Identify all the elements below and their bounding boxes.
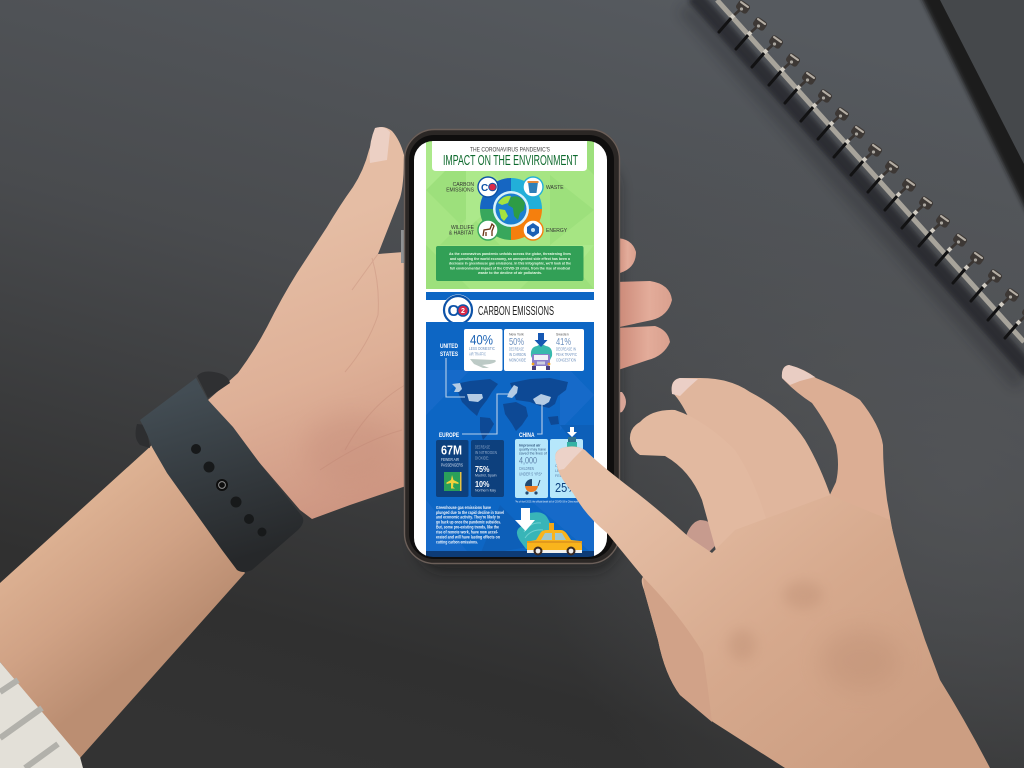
label: China: CHINA (519, 432, 535, 439)
wheel labels: ENERGY (546, 228, 568, 234)
card: China second stat: CARBON (555, 464, 571, 468)
card: air quality in China: saved the lives of (519, 452, 547, 456)
card: traffic cities: PEAK TRAFFIC (556, 352, 577, 357)
card: air quality in China: UNDER 5 YRS* (519, 472, 542, 476)
wheel labels: & HABITAT (449, 230, 474, 236)
icon: emissions stack (567, 427, 577, 447)
icon: CO2 badge: 2 (461, 308, 465, 315)
left forearm (0, 445, 245, 758)
card: air traffic: AIR TRAFFIC (469, 352, 486, 356)
ring finger (672, 378, 855, 570)
section heading (442, 294, 554, 322)
label: United States (440, 344, 458, 356)
intro text box: full environmental impact of the COVID-19 crisis, from the rise of medical (450, 266, 570, 270)
icon: deer (478, 220, 498, 240)
down arrow (515, 508, 535, 531)
card: nitrogen dioxide (471, 440, 504, 497)
card: nitrogen dioxide: DECREASE (475, 444, 490, 450)
icon: CO2 badge (442, 294, 474, 322)
icon: CO2 badge: C (448, 303, 460, 320)
far fingernail (782, 365, 815, 385)
emissions cloud (517, 512, 551, 549)
card: traffic cities: IN CARBON (509, 352, 526, 357)
intro text box: As the coronavirus pandemic unfolds across the globe, threatening lives (449, 252, 571, 256)
title card (432, 141, 587, 171)
taxi (527, 523, 582, 556)
closing paragraph: cutting carbon emissions. (436, 539, 478, 544)
card: nitrogen dioxide: IN NITROGEN (475, 450, 497, 455)
little finger tip (686, 520, 719, 556)
card: China second stat: FELL BY (555, 474, 570, 478)
intro text box: waste to the decline of air pollutants. (477, 271, 542, 275)
blue content panel (426, 322, 594, 557)
wheel labels: WASTE (546, 185, 564, 191)
panel: environment intro (426, 141, 594, 289)
notebook cover (908, 0, 1024, 300)
card: air quality in China (515, 439, 548, 498)
card: China second stat: 25% (555, 480, 577, 495)
card: traffic cities: Sweden (556, 332, 569, 336)
card: traffic cities: DECREASE IN (556, 346, 576, 352)
label: United States: STATES (440, 351, 458, 358)
knuckle shading (728, 581, 900, 690)
label: United States: UNITED (440, 343, 458, 350)
wheel labels: EMISSIONS (446, 188, 475, 194)
map: USA highlight (467, 394, 483, 402)
card: traffic cities: CONGESTION (556, 358, 576, 362)
card: air quality in China: Improved air (519, 444, 541, 448)
main title: IMPACT ON THE ENVIRONMENT (443, 152, 578, 169)
category wheel (478, 177, 543, 240)
card: traffic cities: DECREASE (509, 346, 524, 352)
middle finger (630, 410, 775, 580)
card: China second stat: A (555, 448, 565, 463)
card: Europe passengers: 67M (441, 442, 462, 458)
ring fingernail (672, 378, 698, 396)
card: nitrogen dioxide: DIOXIDE: (475, 456, 489, 460)
panel: carbon emissions (426, 292, 594, 557)
index finger and back of hand (555, 446, 990, 768)
card: air traffic: 40% (470, 332, 493, 348)
intro text box: and upending the world economy, an unexpected side effect has been a (450, 257, 571, 261)
icon: globe (496, 194, 526, 224)
closing paragraph: go back up once the pandemic subsides. (436, 520, 501, 524)
smartphone (401, 129, 620, 564)
icon: passport (444, 472, 462, 491)
notebook spiral binding (684, 0, 1024, 384)
wheel labels: WILDLIFE (451, 225, 475, 231)
right hand (555, 365, 990, 768)
card: air quality in China: CHILDREN (519, 466, 534, 471)
label: Europe: EUROPE (439, 432, 459, 439)
icon: stroller (525, 479, 540, 495)
index fingernail (555, 447, 583, 470)
closing paragraph (436, 505, 504, 544)
card: air quality in China: quality may have (519, 448, 546, 452)
closing paragraph: plunged due to the rapid decline in travel (436, 510, 504, 515)
icon: waste bin (523, 177, 543, 197)
card: traffic cities (504, 329, 584, 371)
illustration: taxi with emissions cloud (515, 508, 582, 556)
card: air quality in China: 4,000 (519, 456, 537, 466)
card: traffic cities: New York (509, 332, 524, 336)
card: China second stat (550, 427, 583, 498)
card: traffic cities: MONOXIDE (509, 358, 526, 362)
connector lines (446, 358, 542, 434)
map: China highlight (533, 394, 551, 405)
card: Europe passengers (436, 440, 468, 497)
phone screen (414, 141, 607, 557)
map: Alaska highlight (452, 383, 462, 392)
card: nitrogen dioxide: Madrid, Spain (475, 474, 497, 478)
wheel labels: CARBON (453, 182, 474, 188)
icon: car with emissions arrow (531, 333, 552, 370)
card: air traffic (464, 329, 502, 371)
phone side button (401, 230, 405, 263)
watch strap (136, 372, 303, 572)
intro text box (436, 246, 584, 281)
intro text box: decrease in greenhouse gas emissions. In this infographic, we'll look at the (449, 262, 571, 266)
icon: thumbnail (370, 127, 390, 163)
subtitle: THE CORONAVIRUS PANDEMIC'S (470, 146, 550, 154)
card: China second stat: LEVELS (555, 469, 569, 473)
card: nitrogen dioxide: Northern Italy (475, 488, 496, 492)
card: air traffic: LESS DOMESTIC (469, 346, 496, 351)
wheel labels (446, 182, 568, 236)
closing paragraph: Greenhouse gas emissions have (436, 505, 491, 510)
card: nitrogen dioxide: 75% (475, 465, 490, 474)
heading text: CARBON EMISSIONS (478, 304, 554, 318)
card: traffic cities: 50% (509, 337, 524, 348)
closing paragraph: But, some pre-existing trends, like the (436, 524, 499, 529)
closing paragraph: rise of remote work, have now accel- (436, 529, 498, 534)
map: Europe highlight (507, 385, 518, 398)
left hand and thumb (208, 127, 406, 519)
world map (452, 378, 568, 440)
card: Europe passengers: FEWER AIR (441, 457, 460, 462)
thumb side shading (643, 577, 712, 722)
card: Europe passengers: PASSENGERS (441, 462, 463, 468)
footnote: *As of April 2020, the official death toll of COVID-19 in China was 4,636 (515, 500, 584, 504)
watch lugs (136, 372, 230, 448)
card: traffic cities: 41% (556, 337, 571, 348)
shirt sleeve (0, 662, 83, 768)
closing paragraph: and economic activity. They're likely to (436, 515, 500, 520)
icon: airplane (470, 359, 496, 368)
icon: CO2: C (481, 183, 488, 194)
icon: energy (523, 220, 543, 240)
closing paragraph: erated and will have lasting effects on (436, 534, 500, 539)
left hand fingers behind phone (615, 238, 672, 414)
card: nitrogen dioxide: 10% (475, 480, 490, 489)
shadow under phone (415, 160, 620, 572)
far finger (782, 365, 895, 545)
watch strap stud (216, 479, 228, 491)
